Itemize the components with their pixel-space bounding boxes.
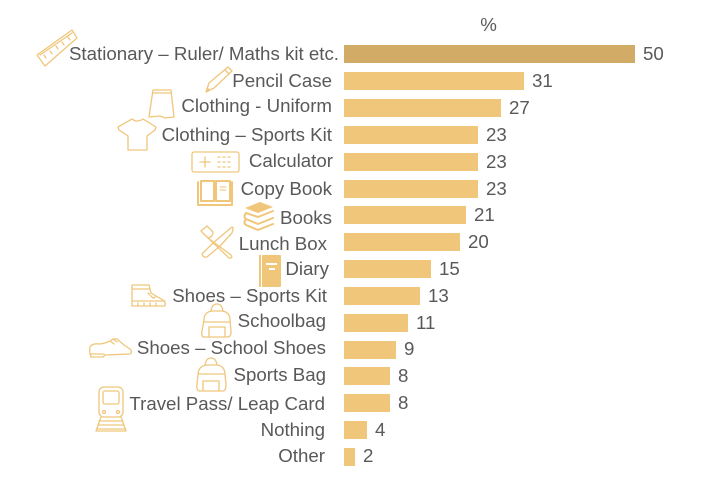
category labels: Calculator — [249, 150, 333, 171]
icon: ruler — [37, 30, 77, 66]
category labels: Travel Pass/ Leap Card — [129, 393, 325, 414]
value labels: 27 — [509, 97, 530, 118]
category labels: Clothing - Uniform — [181, 95, 332, 116]
value labels: 13 — [428, 285, 449, 306]
icon: train — [96, 387, 126, 431]
icon: diary — [259, 255, 281, 287]
icon: copy book — [198, 181, 232, 205]
value labels: 4 — [375, 419, 385, 440]
icon: school shoe — [90, 339, 132, 357]
icon: pencil — [206, 67, 232, 92]
category labels: Schoolbag — [238, 310, 326, 331]
value labels: 23 — [486, 151, 507, 172]
icon: skirt — [149, 90, 174, 118]
value labels: 23 — [486, 178, 507, 199]
icon: sports shoe — [132, 285, 165, 306]
category labels: Books — [280, 207, 332, 228]
icon: schoolbag — [202, 304, 231, 337]
value labels: 31 — [532, 70, 553, 91]
category labels: Stationary – Ruler/ Maths kit etc. — [69, 43, 339, 64]
value labels — [363, 43, 664, 466]
category labels: Shoes – School Shoes — [137, 337, 326, 358]
bar chart — [344, 45, 635, 466]
value labels: 11 — [416, 312, 435, 333]
category labels: Pencil Case — [232, 70, 332, 91]
category labels: Lunch Box — [239, 233, 328, 254]
value labels: 21 — [474, 204, 495, 225]
icon: t-shirt — [118, 119, 156, 150]
value labels: 50 — [643, 43, 664, 64]
value labels: 20 — [468, 231, 489, 252]
category labels: Diary — [285, 258, 330, 279]
icon: sports bag — [197, 358, 226, 391]
category labels: Copy Book — [241, 178, 333, 199]
category labels: Other — [278, 445, 325, 466]
category labels: Nothing — [261, 419, 325, 440]
icon: calculator — [192, 152, 239, 172]
category labels: Clothing – Sports Kit — [162, 124, 333, 145]
value labels: 9 — [404, 338, 414, 359]
value labels: 8 — [398, 365, 408, 386]
category labels: Shoes – Sports Kit — [172, 285, 328, 306]
icon: books — [244, 202, 273, 230]
value labels: 8 — [398, 392, 408, 413]
value labels: 23 — [486, 124, 507, 145]
axis title: percent: % — [480, 14, 497, 35]
value labels: 2 — [363, 445, 373, 466]
value labels: 15 — [439, 258, 460, 279]
category labels: Sports Bag — [234, 364, 326, 385]
icon: fork and knife — [201, 226, 233, 258]
category labels — [69, 43, 339, 466]
